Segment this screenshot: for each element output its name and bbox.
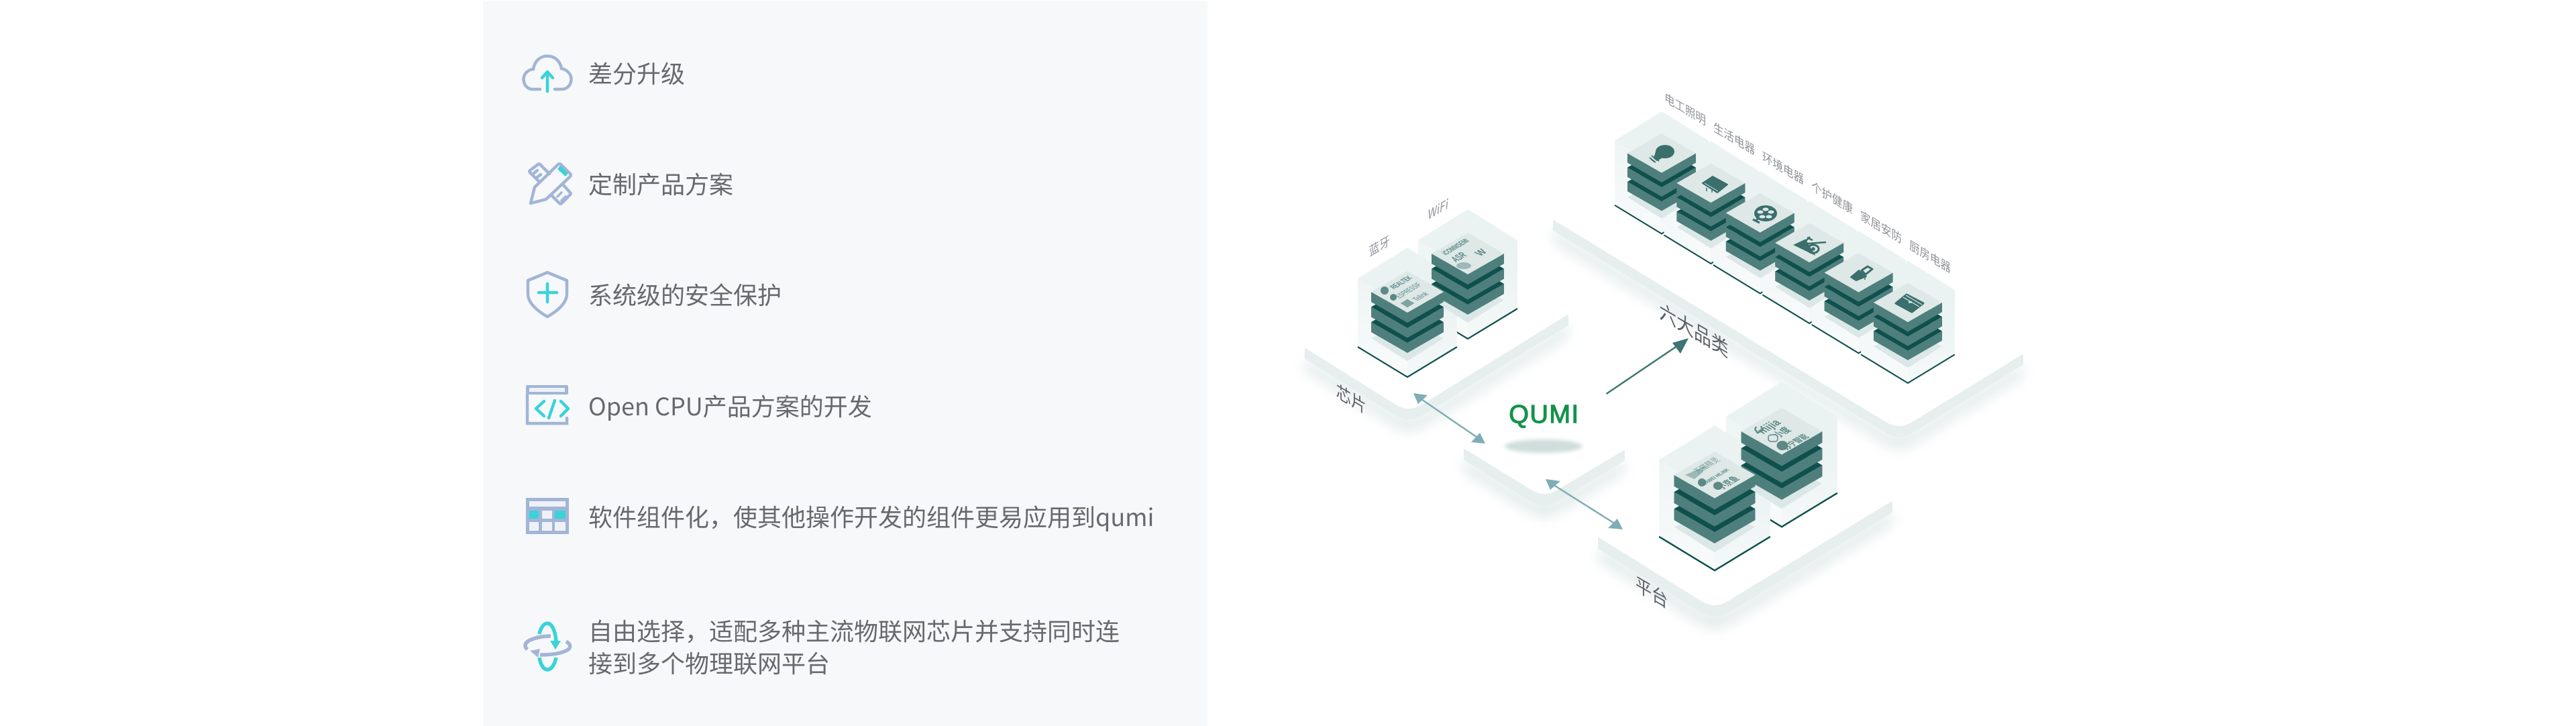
label: 平台: 平台 xyxy=(1635,569,1668,615)
stack: WiFi chips: W xyxy=(1472,248,1490,258)
labels: six categories: 电工照明 xyxy=(1664,88,1706,129)
stack: 厨房电器 xyxy=(1874,283,1942,368)
platform: chips xyxy=(1305,254,1568,429)
labels: six categories: 生活电器 xyxy=(1713,117,1755,159)
stack: 家居安防 xyxy=(1825,253,1893,338)
stack: Tmall platforms: 天猫精灵 xyxy=(1692,456,1723,475)
stack cluster: six categories xyxy=(1615,111,1955,383)
platform: IoT platforms xyxy=(1599,434,1892,627)
icon: code window xyxy=(526,385,568,423)
label: WiFi: WiFi xyxy=(1426,194,1450,224)
panel: feature list xyxy=(483,1,1208,726)
text: 自由选择 xyxy=(588,613,1120,680)
label: 芯片: 芯片 xyxy=(1336,377,1366,419)
label: 蓝牙: 蓝牙 xyxy=(1368,231,1391,260)
text: Open CPU产品方案的开发: Open CPU产品方案的开发 xyxy=(588,388,872,423)
labels: six categories: 环境电器 xyxy=(1762,147,1804,189)
QUMI shadow xyxy=(1505,439,1582,453)
arrow: QUMI to platforms xyxy=(1546,479,1623,529)
label: 六大品类: 六大品类 xyxy=(1659,294,1729,364)
icon: orbit arrows xyxy=(525,623,570,670)
labels: six categories xyxy=(1664,88,1951,277)
stack: Bluetooth chips: ESPRESSIF xyxy=(1394,282,1424,300)
arrow: QUMI to six categories xyxy=(1606,338,1688,394)
stack: 电工照明 xyxy=(1627,134,1696,219)
stack: Tmall platforms: 小京鱼 xyxy=(1714,474,1741,491)
arrow: chips to QUMI xyxy=(1413,393,1485,444)
stack: Bluetooth chips xyxy=(1371,271,1444,361)
icon: component grid xyxy=(526,498,569,534)
icon: shield xyxy=(528,272,567,317)
stack: Tmall platforms: HUAWEI HILINK xyxy=(1698,467,1731,487)
icon: pencil and ruler xyxy=(529,164,571,204)
labels: six categories: 家居安防 xyxy=(1860,206,1902,248)
text: 自由选择: 接到多个物理联网平台 xyxy=(588,645,830,680)
stack: WiFi chips: ASR xyxy=(1447,250,1470,264)
stack: WiFi chips xyxy=(1432,233,1504,323)
text: 定制产品方案: 定制产品方案 xyxy=(588,166,733,201)
QUMI logo: QUMI xyxy=(1509,401,1580,429)
stack: Mijia platforms: mijia xyxy=(1754,417,1784,436)
text: 自由选择: 自由选择，适配多种主流物联网芯片并支持同时连 xyxy=(588,613,1120,647)
stack cluster: platforms xyxy=(1659,382,1837,570)
stack: Mijia platforms: 苏宁智能 xyxy=(1780,432,1811,452)
stack: 个护健康 xyxy=(1775,223,1843,308)
stack: 生活电器 xyxy=(1676,164,1745,248)
stack: Mijia platforms: 小度 xyxy=(1770,425,1794,439)
stack: Bluetooth chips: Telink xyxy=(1411,291,1432,303)
text: 系统级的安全保护: 系统级的安全保护 xyxy=(588,276,782,311)
platform: QUMI xyxy=(1464,403,1624,515)
stack: Bluetooth chips: REALTEK xyxy=(1389,274,1415,291)
labels: six categories: 厨房电器 xyxy=(1909,236,1951,277)
text: 差分升级: 差分升级 xyxy=(588,55,685,90)
platform: six categories xyxy=(1554,148,2023,447)
stack: Mijia platforms xyxy=(1741,408,1822,509)
stack: 环境电器 xyxy=(1726,193,1794,278)
stack: Tmall platforms xyxy=(1674,452,1755,552)
text: 软件组件化: 软件组件化，使其他操作开发的组件更易应用到qumi xyxy=(588,499,1154,533)
icon: cloud upload xyxy=(523,56,572,91)
stack: WiFi chips: iCOMMSEMI xyxy=(1440,238,1472,256)
stack cluster: chips xyxy=(1358,209,1517,377)
labels: six categories: 个护健康 xyxy=(1811,176,1853,218)
